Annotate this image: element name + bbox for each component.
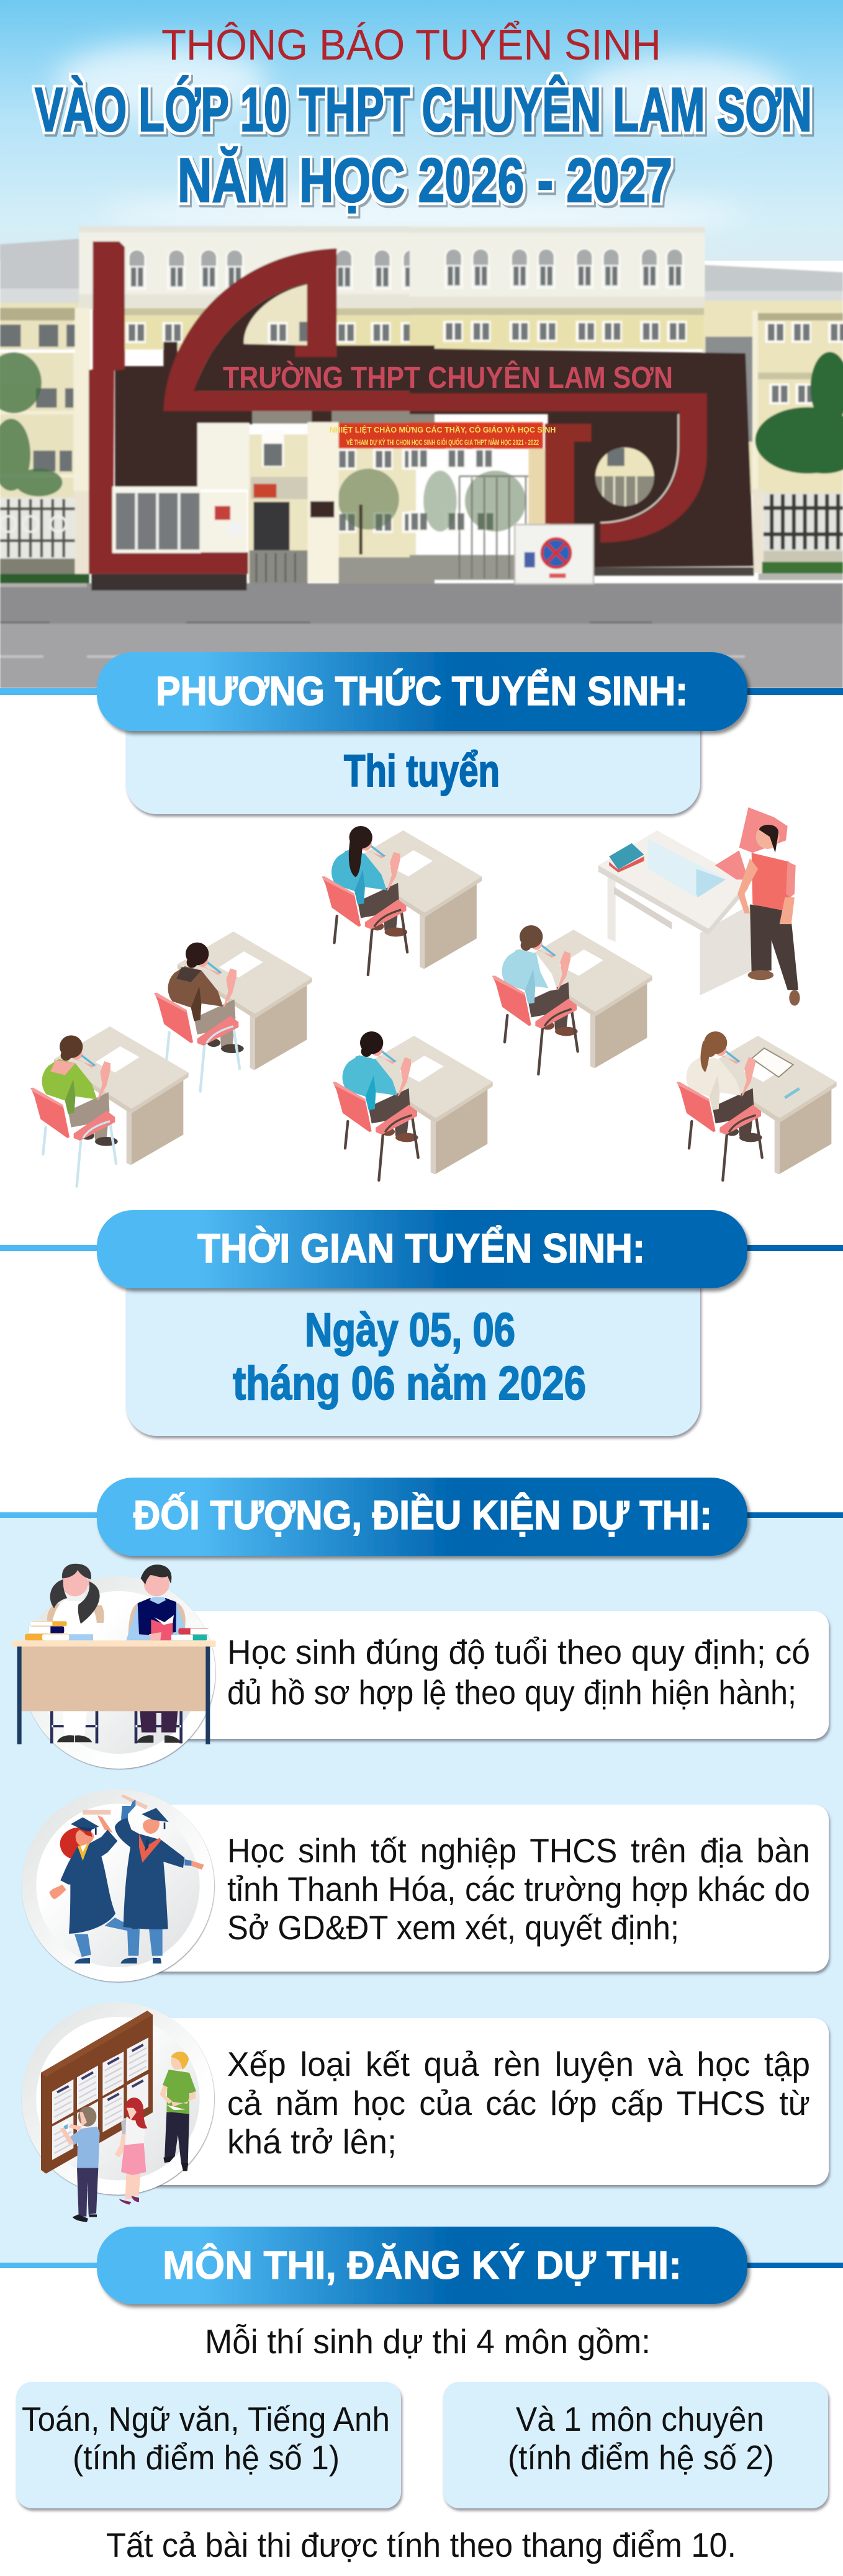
box: core subjects (16, 2382, 401, 2508)
heading: THỜI GIAN TUYỂN SINH: (197, 1225, 645, 1271)
fence left (0, 498, 75, 559)
intro text: Mỗi thí sinh dự thi 4 môn gồm: (205, 2322, 651, 2361)
gate structure (89, 241, 435, 591)
section: admission time: tháng 06 năm 2026 (233, 1357, 586, 1410)
box: specialised subject (443, 2382, 828, 2508)
student ponytail (676, 1031, 837, 1180)
icon: students at desk (12, 1564, 216, 1769)
box: core subjects: Toán, Ngữ văn, Tiếng Anh (22, 2400, 390, 2438)
title: THÔNG BÁO TUYỂN SINH (161, 20, 661, 69)
section: conditions (0, 1478, 843, 2266)
text: Học sinh tốt nghiệp THCS trên địa bàn (227, 1831, 810, 1870)
panel: time (126, 1285, 700, 1436)
card 3: khá trở lên; (227, 2122, 397, 2161)
photo right half (410, 226, 843, 580)
illustration: exam room (30, 807, 837, 1187)
title: NĂM HỌC 2026 - 2027 (178, 146, 672, 215)
banner: VỀ THAM DỰ KỲ THI CHỌN HỌC SINH GIỎI QUỐC GIA THPT NĂM HỌC 2021 - 2022 (346, 438, 539, 447)
date text: Ngày 05, 06 (305, 1304, 515, 1357)
card 1: đủ hồ sơ hợp lệ theo quy định hiện hành; (227, 1673, 796, 1712)
box: core subjects: (tính điểm hệ số 1) (73, 2438, 340, 2477)
card 2: Sở GD&ĐT xem xét, quyết định; (227, 1908, 679, 1947)
header pill: method (97, 652, 747, 731)
heading: MÔN THI, ĐĂNG KÝ DỰ THI: (163, 2242, 682, 2287)
box: specialised subject: Và 1 môn chuyên (516, 2400, 764, 2438)
card 2: tỉnh Thanh Hóa, các trường hợp khác do (227, 1870, 810, 1908)
icon: notice board (22, 2003, 214, 2222)
photo left half (0, 227, 435, 591)
heading: ĐỐI TƯỢNG, ĐIỀU KIỆN DỰ THI: (133, 1492, 712, 1538)
box: specialised subject: (tính điểm hệ số 2) (508, 2438, 774, 2477)
road (0, 583, 843, 688)
method value: Thi tuyển (344, 747, 500, 796)
through the gate (248, 434, 416, 580)
student white shirt (492, 925, 652, 1074)
laptop (648, 838, 723, 897)
text: Xếp loại kết quả rèn luyện và học tập (227, 2045, 810, 2083)
title (35, 20, 812, 215)
text: Học sinh đúng độ tuổi theo quy định; có (227, 1633, 810, 1671)
school photo (0, 226, 843, 688)
teacher (715, 807, 800, 1006)
icon: graduates (22, 1789, 214, 1981)
sky background (0, 0, 843, 261)
card 2 (143, 1805, 829, 1972)
header pill: conditions (97, 1478, 747, 1556)
student top middle (322, 826, 482, 975)
panel: method (126, 726, 700, 814)
section: admission time (0, 1210, 843, 1436)
header pill: time (97, 1210, 747, 1288)
footer note: Tất cả bài thi được tính theo thang điểm 10. (106, 2526, 736, 2564)
teacher desk (598, 830, 764, 995)
parking sign box (515, 524, 593, 584)
student brown jacket (154, 931, 312, 1092)
card 3: cả năm học của các lớp cấp THCS từ (227, 2084, 810, 2122)
heading: PHƯƠNG THỨC TUYỂN SINH: (156, 668, 688, 714)
student middle bottom (332, 1031, 493, 1180)
card 1 (143, 1611, 829, 1739)
banner: NHIỆT LIỆT CHÀO MỪNG CÁC THẦY, CÔ GIÁO VÀ HỌC SINH (330, 425, 556, 434)
card 3 (143, 2018, 829, 2185)
banner (330, 425, 556, 447)
section: admission method (0, 652, 843, 814)
gate sign: TRƯỜNG THPT CHUYÊN LAM SƠN (223, 361, 673, 395)
student green shirt (30, 1026, 189, 1187)
books (609, 843, 644, 869)
hedge and fence front strips redrawn over road edge (0, 583, 87, 587)
header pill: subjects (97, 2227, 747, 2304)
section: subjects (0, 2227, 843, 2564)
